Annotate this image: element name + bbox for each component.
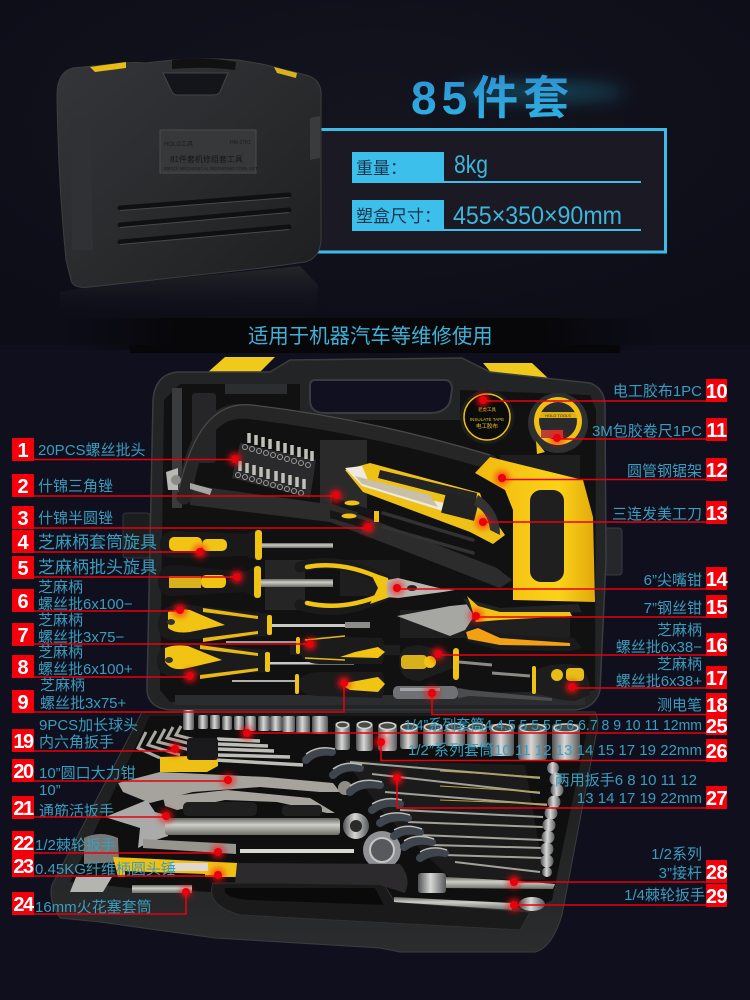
- callout 28: 28: [706, 862, 727, 884]
- callout 23: 0.45KG纤维柄圆头锤: [35, 861, 176, 878]
- callout 6: 芝麻柄: [38, 579, 83, 596]
- bit screwdriver: [158, 565, 333, 598]
- callout 25: 25: [706, 716, 727, 738]
- callout 19: 19: [13, 731, 34, 753]
- callout 17: 螺丝批6x38+: [616, 673, 702, 690]
- callout 14: 6”尖嘴钳: [644, 572, 702, 589]
- callout 19: 内六角扳手: [39, 734, 114, 751]
- weight row: 8kg: [454, 151, 488, 179]
- 1/2 ratchet wrench: [143, 831, 401, 869]
- callout 16: 芝麻柄: [657, 622, 702, 639]
- saw blade end: [190, 483, 212, 495]
- tray blocks: [172, 384, 585, 705]
- callout 28: 3”接杆: [659, 865, 702, 882]
- callout 2: 2: [17, 476, 29, 498]
- callout 17: [565, 656, 727, 694]
- callout 16: 16: [706, 635, 727, 657]
- callout 20: 20: [13, 761, 34, 783]
- tape measure: HOLO TOOLS: [545, 413, 571, 418]
- callout 14: [390, 567, 728, 595]
- case label plate: HM-2781: [230, 140, 251, 146]
- callout 2: 什锦三角锉: [38, 478, 113, 495]
- combination wrenches: [306, 748, 564, 880]
- callout 27: 13 14 17 19 22mm: [577, 790, 702, 807]
- callout 5: 芝麻柄批头旋具: [38, 558, 157, 577]
- handle grip: [172, 58, 236, 70]
- callout 13: [476, 501, 727, 529]
- callout 16: [431, 622, 727, 661]
- long nose pliers: [300, 563, 455, 609]
- callout 9: [12, 676, 351, 714]
- electrical tape: [460, 390, 514, 444]
- callout 2: [12, 474, 343, 503]
- locking pliers: [118, 772, 352, 816]
- callout 26: 1/2”系列套筒10 11 12 13 14 15 17 19 22mm: [408, 742, 702, 759]
- callout 6: [12, 579, 187, 617]
- callout 9: 芝麻柄: [40, 677, 85, 694]
- callout 7: 螺丝批3x75−: [38, 629, 125, 646]
- side grips: [70, 118, 93, 250]
- small cross screwdriver 3x75: [232, 672, 385, 698]
- callout 21: 通筋活扳手: [39, 803, 114, 820]
- stubby screwdriver 17: [532, 664, 590, 701]
- upper shell: [147, 358, 606, 710]
- open tool case: lower tray: [51, 710, 598, 952]
- caption band: [60, 318, 660, 350]
- callout 25: 1/4”系列套筒4 4.5 5 5.5 5 6 6.7 8 9 10 11 12mm: [404, 717, 702, 734]
- case size row: 455×350×90mm: [453, 202, 622, 230]
- callout 12: [495, 458, 727, 485]
- top background: [0, 0, 750, 345]
- callout 26: 26: [706, 741, 727, 763]
- open tool case: upper tray: [123, 357, 622, 710]
- adjustable wrench: [105, 800, 369, 848]
- case reflection: [60, 266, 318, 318]
- callout 18: 18: [706, 695, 727, 717]
- callout 8: [12, 644, 197, 683]
- callout 11: [550, 418, 727, 445]
- callout 12: 圆管钢锯架: [627, 463, 702, 480]
- callout 18: 测电笔: [657, 697, 702, 714]
- saw tube: [184, 411, 490, 497]
- closed tool case: [57, 58, 321, 318]
- callout 21: 21: [13, 798, 34, 820]
- wing nut: [166, 468, 178, 490]
- tape measure: [528, 393, 588, 454]
- callout 14: 14: [706, 569, 728, 591]
- callout 1: 20PCS螺丝批头: [38, 442, 146, 459]
- callout 1: 1: [17, 440, 29, 462]
- callout 7: 7: [17, 625, 29, 647]
- callout 7: 芝麻柄: [38, 612, 83, 629]
- hex key holder: [160, 738, 218, 772]
- callout 1: [12, 438, 242, 466]
- hacksaw: [166, 405, 595, 602]
- cutter knife: [345, 463, 505, 544]
- case label plate: HOLO工具: [164, 141, 193, 148]
- case label plate: 85PCS MECHANICAL REPAIRING TOOL SET: [164, 166, 258, 171]
- case label plate: 81件套机修组套工具: [170, 154, 243, 164]
- callout 23: 23: [13, 856, 34, 878]
- callout 13: 13: [706, 503, 727, 525]
- voltage tester pen: [393, 686, 552, 701]
- electrical tape: 电工胶布: [476, 422, 498, 430]
- extension bar: [418, 873, 555, 893]
- dark strip above tools: [130, 345, 620, 353]
- callout 5: 5: [17, 558, 29, 580]
- panel: specifications: [310, 130, 666, 252]
- callout 19: [12, 717, 182, 756]
- screwdriver bit set: [232, 433, 316, 498]
- callout 4: 芝麻柄套筒旋具: [38, 533, 157, 552]
- callout 21: 10”: [39, 782, 61, 799]
- callout 7: [12, 612, 317, 651]
- callout 3: 什锦半圆锉: [38, 510, 113, 527]
- case label plate: [160, 130, 258, 173]
- small flat screwdriver 3x75: [226, 636, 385, 664]
- 1/4 inch sockets: [183, 710, 328, 734]
- callout 27: 27: [706, 788, 727, 810]
- weight row: [352, 151, 641, 183]
- lower shell: [51, 712, 598, 952]
- spark plug socket: [132, 885, 192, 893]
- callout 9: 9: [17, 692, 29, 714]
- callout 4: 4: [17, 532, 29, 554]
- socket screwdriver: [160, 530, 333, 560]
- callout 8: 螺丝批6x100+: [38, 661, 133, 678]
- callout 19: 9PCS加长球头: [39, 717, 138, 734]
- callout 17: 17: [706, 668, 727, 690]
- callout 3: [12, 506, 375, 534]
- callout 5: [12, 556, 244, 584]
- callout 28: [507, 846, 727, 889]
- callout 27: [390, 771, 727, 810]
- cross screwdriver 6x100: [157, 642, 354, 679]
- callout 21: [12, 782, 173, 823]
- flat screwdriver 6x100: [158, 604, 370, 642]
- yellow clips: [90, 62, 126, 72]
- callout 8: 芝麻柄: [38, 644, 83, 661]
- handle opening: [310, 380, 452, 413]
- callout 4: [12, 530, 207, 559]
- stubby screwdriver 16: [399, 645, 530, 681]
- callout 6: 螺丝批6x100−: [38, 596, 133, 613]
- yellow corner clips: [207, 357, 275, 374]
- callout 10: 电工胶布1PC: [613, 383, 702, 400]
- weight row: 重量：: [356, 159, 407, 178]
- callout 13: 三连发美工刀: [612, 506, 702, 523]
- callout 29: [507, 884, 727, 912]
- callout 29: 1/4棘轮扳手: [624, 887, 705, 904]
- callout 20: 10”圆口大力钳: [39, 765, 136, 782]
- callout 22: 1/2棘轮扳手: [35, 837, 116, 854]
- ribs: [120, 195, 289, 244]
- callout 23: [12, 854, 225, 882]
- electrical tape: 老虎工具: [478, 406, 496, 413]
- callout 17: 芝麻柄: [657, 656, 702, 673]
- callout 24: [12, 886, 192, 916]
- 1/4 ratchet: [394, 897, 545, 911]
- caption band: 适用于机器汽车等维修使用: [248, 325, 493, 348]
- files: [383, 513, 473, 553]
- callout 29: 29: [706, 886, 727, 908]
- callout 15: 15: [706, 597, 727, 619]
- callout 25: [240, 716, 727, 740]
- diagonal bar: [190, 485, 512, 588]
- callout 22: [12, 831, 225, 859]
- handle opening: [163, 73, 228, 95]
- callout 12: 12: [706, 460, 727, 482]
- case size row: 塑盒尺寸：: [356, 207, 441, 226]
- saw handle: [475, 457, 595, 602]
- callout 8: 8: [17, 657, 29, 679]
- callout 10: [476, 379, 727, 407]
- callout 24: 16mm火花塞套筒: [35, 898, 152, 916]
- callout 26: [374, 735, 727, 763]
- callout 10: 10: [706, 381, 727, 403]
- side clasps: [123, 513, 150, 558]
- callout 11: 3M包胶卷尺1PC: [592, 423, 702, 440]
- file handles: [330, 497, 379, 530]
- callout 18: [425, 686, 727, 717]
- callout 15: 7”钢丝钳: [644, 600, 702, 617]
- callout 28: 1/2系列: [651, 846, 702, 863]
- callout 22: 22: [13, 833, 34, 855]
- hammer: [70, 834, 408, 893]
- title: 85件套: [411, 72, 574, 124]
- callout 15: [469, 595, 727, 623]
- callout 20: [12, 759, 235, 787]
- combination pliers: [397, 596, 582, 651]
- callout 16: 螺丝批6x38−: [616, 639, 702, 656]
- callout 3: 3: [17, 508, 29, 530]
- case size row: [352, 200, 641, 231]
- callout 6: 6: [17, 591, 29, 613]
- callout 11: 11: [706, 420, 727, 442]
- inner tray: [160, 384, 596, 702]
- handle rim: [212, 883, 530, 930]
- callout 24: 24: [13, 894, 35, 916]
- callout 9: 螺丝批3x75+: [40, 695, 127, 712]
- electrical tape: INSULATE TAPE: [470, 417, 504, 422]
- callout 27: 两用扳手6 8 10 11 12: [555, 772, 697, 789]
- hex key wrenches: [138, 726, 303, 765]
- 1/2 inch sockets: [335, 722, 580, 760]
